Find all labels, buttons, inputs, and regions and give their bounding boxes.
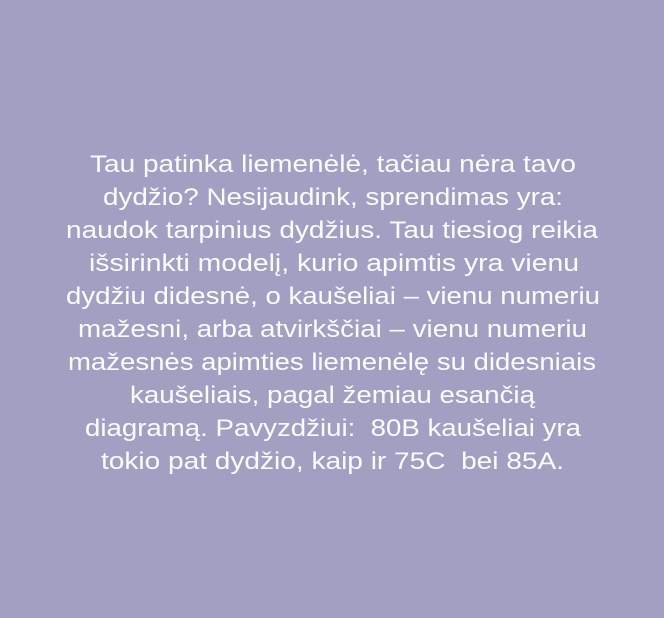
text block: sizing advice paragraph: tokio pat dydžio, kaip ir 75C bei 85A. xyxy=(101,448,564,475)
text block: sizing advice paragraph: naudok tarpinius dydžius. Tau tiesiog reikia xyxy=(66,217,599,244)
text block: sizing advice paragraph: dydžio? Nesijaudink, sprendimas yra: xyxy=(103,184,563,211)
text block: sizing advice paragraph: mažesnės apimties liemenėlę su didesniais xyxy=(68,349,596,376)
text block: sizing advice paragraph xyxy=(66,151,600,475)
text block: sizing advice paragraph: išsirinkti modelį, kurio apimtis yra vienu xyxy=(89,250,579,277)
text block: sizing advice paragraph: kaušeliais, pagal žemiau esančią xyxy=(130,382,536,409)
text block: sizing advice paragraph: Tau patinka liemenėlė, tačiau nėra tavo xyxy=(90,151,576,178)
text block: sizing advice paragraph: dydžiu didesnė, o kaušeliai – vienu numeriu xyxy=(66,283,600,310)
text block: sizing advice paragraph: diagramą. Pavyzdžiui: 80B kaušeliai yra xyxy=(85,415,582,442)
text block: sizing advice paragraph: mažesni, arba atvirkščiai – vienu numeriu xyxy=(78,316,587,343)
